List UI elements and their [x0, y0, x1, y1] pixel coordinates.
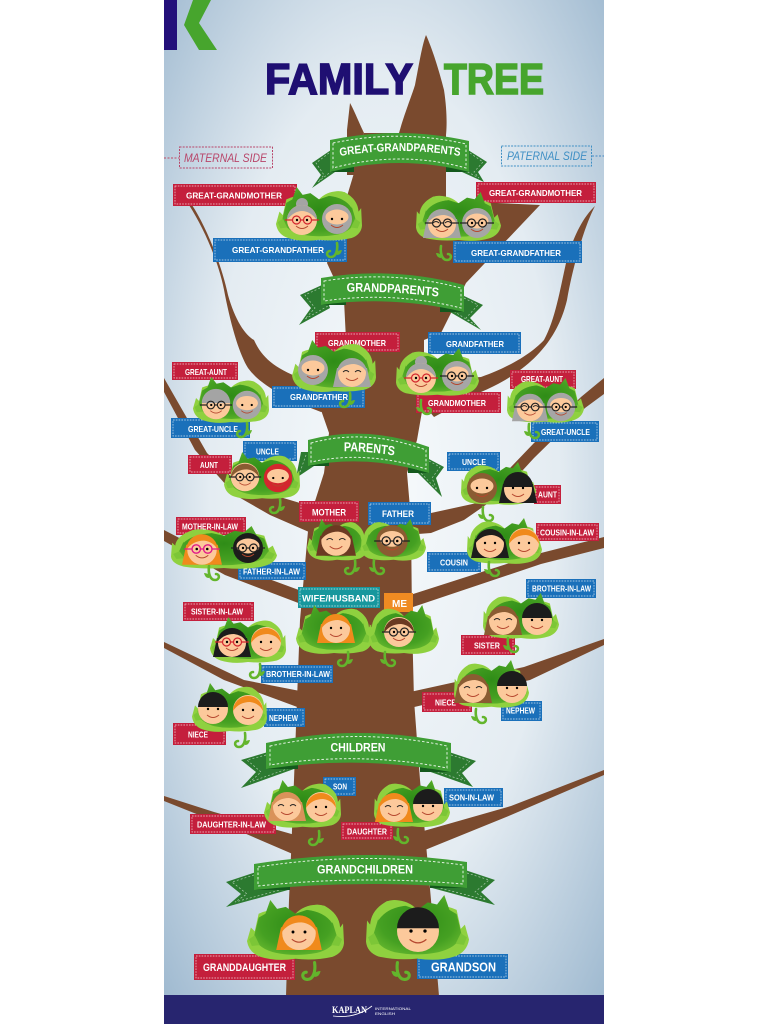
- leaves: [374, 780, 450, 843]
- leaves: [396, 348, 479, 414]
- face: brother-in-law: [251, 627, 281, 657]
- face: grandfather: [298, 355, 328, 385]
- label: me: ME: [392, 598, 407, 610]
- family: sister and brother-in-law: [461, 579, 596, 655]
- label: grandson: [417, 954, 508, 979]
- label: great-grandfather: GREAT-GRANDFATHER: [232, 245, 324, 255]
- face: grandfather: [440, 361, 474, 391]
- face: me: [382, 617, 416, 647]
- label: grandfather: GRANDFATHER: [446, 339, 504, 349]
- face: great-aunt: [512, 394, 548, 421]
- title: FAMILY: [265, 55, 413, 104]
- leaves: [210, 617, 286, 678]
- label: brother-in-law: BROTHER-IN-LAW: [532, 584, 592, 594]
- logo: K mark: [164, 0, 217, 50]
- face: wife or husband: [317, 614, 355, 643]
- leaves: [264, 780, 341, 845]
- label: nephew: NEPHEW: [269, 713, 299, 723]
- footer logo: ENGLISH: [375, 1012, 395, 1016]
- leaves: [307, 519, 426, 574]
- leaves: [224, 452, 300, 513]
- label: great-aunt: GREAT-AUNT: [185, 367, 228, 377]
- leaves: [276, 187, 362, 257]
- face: sister-in-law: [213, 628, 251, 657]
- footer logo: INTERNATIONAL: [375, 1007, 411, 1011]
- leaves: [366, 895, 469, 979]
- banner: great-grandparents: GREAT-GRANDPARENTS: [340, 143, 460, 156]
- label: niece: NIECE: [188, 730, 208, 740]
- label: father: FATHER: [382, 509, 414, 519]
- label: niece: NIECE: [435, 698, 456, 708]
- face: uncle: [467, 473, 497, 503]
- family: granddaughter: [194, 900, 344, 980]
- leaves: [454, 660, 529, 723]
- leaves: [483, 593, 559, 652]
- label: great-grandmother: GREAT-GRANDMOTHER: [489, 188, 582, 198]
- face: cousin: [471, 529, 509, 558]
- label: aunt: AUNT: [538, 490, 558, 500]
- leaves: [171, 526, 277, 580]
- label: brother-in-law: BROTHER-IN-LAW: [266, 669, 331, 679]
- label: daughter: DAUGHTER: [347, 826, 387, 836]
- label: daughter-in-law: DAUGHTER-IN-LAW: [197, 820, 267, 830]
- family: great-grandparents maternal: [173, 184, 362, 262]
- face: grandson: [397, 907, 439, 952]
- family: uncle and aunt paternal: [447, 452, 561, 521]
- face: son: [306, 792, 336, 822]
- face: uncle: [264, 464, 292, 492]
- face: sister: [484, 606, 522, 635]
- footer bar: [164, 995, 604, 1024]
- family: grandparents paternal: [396, 332, 521, 414]
- label: sister: SISTER: [474, 640, 500, 650]
- leaves: [192, 683, 267, 747]
- tree trunk and branches: [164, 35, 604, 996]
- label: grandfather: GRANDFATHER: [290, 392, 348, 402]
- family: great-aunt and great-uncle maternal: [171, 362, 269, 438]
- label: aunt: AUNT: [200, 460, 219, 470]
- label: sister-in-law: [183, 602, 254, 621]
- face: daughter: [375, 793, 413, 822]
- face: daughter-in-law: [268, 792, 306, 821]
- family: cousins: [427, 518, 599, 576]
- face: great-grandmother: [423, 209, 461, 238]
- label: uncle: UNCLE: [462, 457, 486, 467]
- label: cousin: COUSIN: [440, 558, 468, 568]
- label: great-grandfather: GREAT-GRANDFATHER: [471, 248, 561, 258]
- label: wife/husband: [298, 587, 380, 608]
- face: aunt: [499, 472, 537, 503]
- label: cousin-in-law: COUSIN-IN-LAW: [540, 528, 595, 538]
- label: son-in-law: [444, 788, 503, 807]
- face: nephew: [497, 671, 527, 703]
- maternal side tag: MATERNAL SIDE: [184, 153, 267, 165]
- leaves: [296, 605, 439, 666]
- leaves: [461, 462, 536, 521]
- family: great-grandparents paternal: [416, 182, 596, 263]
- family: mother and father: [299, 501, 431, 574]
- paternal side tag: PATERNAL SIDE: [507, 151, 587, 163]
- face: nephew: [233, 695, 263, 725]
- label: son-in-law: SON-IN-LAW: [449, 792, 495, 802]
- label: grandmother: GRANDMOTHER: [328, 338, 386, 348]
- family: niece and nephew maternal: [173, 683, 305, 747]
- leaves: [247, 900, 344, 979]
- family: son and daughter-in-law: [190, 777, 356, 845]
- leaves: [467, 518, 542, 576]
- face: father: [374, 525, 410, 557]
- label: great-grandmother: [173, 184, 297, 206]
- label: great-grandmother: GREAT-GRANDMOTHER: [186, 190, 282, 200]
- family: siblings-in-law: [183, 602, 333, 683]
- banner: grandchildren: [226, 855, 495, 907]
- face: aunt: [229, 463, 261, 491]
- family: great-aunt and great-uncle paternal: [507, 370, 599, 442]
- label: mother-in-law: MOTHER-IN-LAW: [182, 522, 239, 532]
- label: great-aunt: GREAT-AUNT: [521, 374, 564, 384]
- face: son-in-law: [413, 789, 443, 821]
- label: great-grandfather: [213, 238, 347, 262]
- label: brother-in-law: [261, 665, 333, 683]
- title: TREE: [444, 55, 544, 104]
- family: aunt and uncle maternal: [188, 441, 300, 513]
- label: great-grandmother: [476, 182, 596, 203]
- face: niece: [198, 692, 228, 724]
- label: son: [323, 777, 356, 796]
- face: father-in-law: [231, 533, 265, 563]
- face: cousin-in-law: [509, 528, 539, 558]
- banner: grandparents: GRANDPARENTS: [347, 283, 438, 296]
- label: cousin-in-law: [536, 523, 599, 541]
- face: mother: [316, 525, 356, 556]
- background panel: [164, 0, 604, 1024]
- label: wife/husband: WIFE/HUSBAND: [302, 594, 375, 604]
- face: great-uncle: [233, 391, 261, 419]
- label: me: [384, 593, 413, 612]
- leaves: [193, 377, 269, 437]
- face: niece: [454, 674, 492, 703]
- leaves: [292, 340, 376, 407]
- face: mother-in-law: [182, 534, 222, 565]
- title: [265, 55, 544, 104]
- banner: children: [241, 733, 476, 788]
- family: wife or husband and me: [296, 587, 439, 666]
- leaves: [416, 192, 501, 260]
- face: brother: [522, 603, 552, 635]
- face: grandmother: [404, 356, 438, 393]
- label: mother: MOTHER: [312, 508, 346, 518]
- footer logo: KAPLAN: [332, 1005, 367, 1015]
- label: granddaughter: GRANDDAUGHTER: [203, 962, 286, 974]
- face: great-grandfather: [460, 208, 494, 238]
- banner: great-grandparents: [312, 133, 487, 188]
- label: father-in-law: FATHER-IN-LAW: [243, 566, 301, 576]
- label: son: SON: [333, 782, 347, 792]
- footer logo: [332, 1005, 411, 1017]
- banner: parents: [297, 434, 444, 497]
- face: grandmother: [333, 358, 371, 387]
- face: great-grandfather: [322, 204, 352, 234]
- label: great-uncle: GREAT-UNCLE: [188, 424, 238, 434]
- label: nephew: NEPHEW: [506, 706, 536, 716]
- face: great-aunt: [200, 389, 232, 419]
- label: grandmother: GRANDMOTHER: [428, 398, 486, 408]
- label: great-grandfather: [453, 241, 582, 263]
- family: grandson: [366, 895, 508, 979]
- banner: children: CHILDREN: [330, 742, 386, 754]
- label: uncle: UNCLE: [256, 446, 279, 456]
- family: in-laws maternal: [171, 517, 306, 580]
- family: niece and nephew paternal: [422, 660, 542, 723]
- label: daughter: [341, 822, 393, 840]
- face: great-grandmother: [285, 198, 319, 235]
- label: granddaughter: [194, 954, 295, 980]
- label: sister-in-law: SISTER-IN-LAW: [191, 606, 244, 616]
- label: cousin: [427, 552, 481, 572]
- face: great-uncle: [545, 393, 577, 421]
- label: daughter-in-law: [190, 814, 276, 834]
- paternal side tag: [502, 146, 604, 166]
- label: great-uncle: GREAT-UNCLE: [541, 427, 590, 437]
- leaves: [507, 378, 584, 438]
- family: grandparents maternal: [272, 332, 400, 408]
- banner: parents: PARENTS: [344, 442, 394, 456]
- face: granddaughter: [276, 915, 322, 950]
- family: daughter and son-in-law: [341, 780, 503, 843]
- banner: grandchildren: GRANDCHILDREN: [317, 862, 413, 876]
- label: grandson: GRANDSON: [431, 960, 496, 974]
- maternal side tag: [164, 147, 272, 168]
- banner: grandparents: [299, 273, 483, 330]
